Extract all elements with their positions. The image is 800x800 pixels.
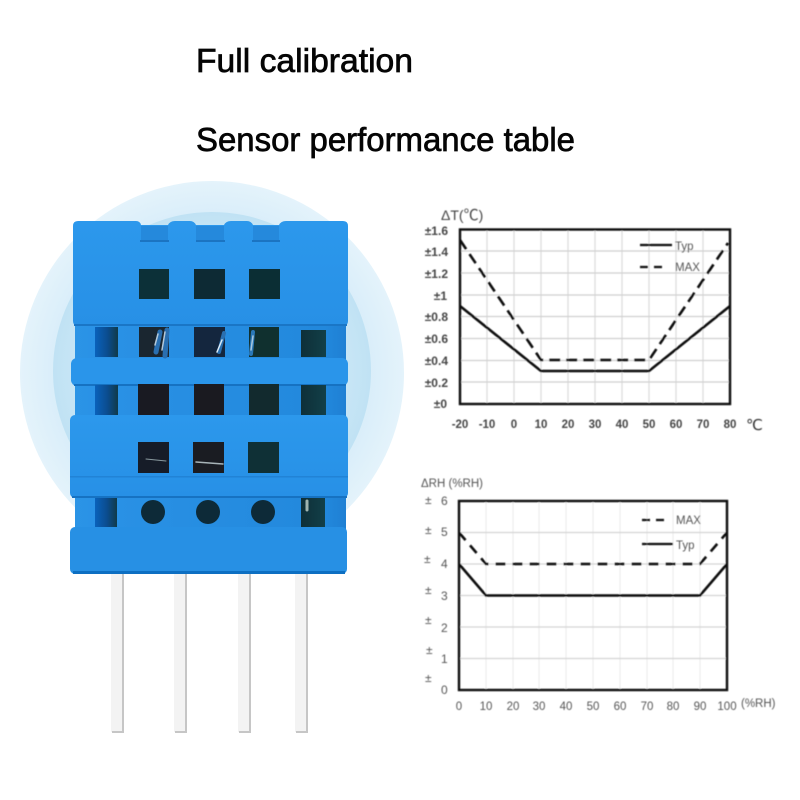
temperature x-axis labels: -10 — [479, 419, 495, 431]
humidity y-axis labels: ± — [425, 523, 432, 537]
temperature x-axis labels: 40 — [616, 419, 628, 431]
humidity y-axis labels: 3 — [441, 589, 448, 603]
lower section — [70, 415, 348, 498]
y-axis title: ΔT(℃) — [441, 204, 483, 225]
temperature x-axis labels: 80 — [724, 419, 736, 431]
humidity unit: (%RH) — [741, 698, 776, 710]
temperature x-axis labels: 20 — [562, 419, 574, 431]
humidity y-axis labels — [424, 493, 448, 697]
humidity x-axis labels: 80 — [667, 701, 679, 713]
humidity x-axis labels — [456, 701, 737, 713]
chart: humidity error — [421, 478, 776, 713]
title: heading text — [196, 42, 575, 158]
sensor grille windows — [95, 269, 326, 527]
temperature unit: ℃ — [746, 417, 763, 434]
top section with notches — [73, 221, 348, 326]
temperature y-axis labels: ±1.6 — [425, 224, 448, 238]
humidity x-axis labels: 90 — [694, 701, 706, 713]
temperature x-axis labels: 70 — [697, 419, 709, 431]
temperature gridlines — [460, 229, 730, 404]
temperature y-axis labels — [425, 224, 448, 411]
humidity legend: Typ — [676, 540, 695, 552]
background glow circles — [20, 181, 404, 565]
chart: temperature error — [425, 204, 763, 434]
humidity y-axis labels: 1 — [441, 652, 448, 666]
temperature x-axis labels — [452, 419, 736, 431]
humidity plot frame — [459, 501, 727, 690]
humidity y-axis labels: ± — [424, 552, 431, 566]
temperature legend: MAX — [675, 262, 700, 274]
temperature y-axis labels: ±0.4 — [425, 354, 448, 368]
humidity y-axis labels: ± — [425, 493, 432, 507]
humidity x-axis labels: 100 — [717, 701, 737, 713]
bottom bar — [70, 527, 347, 574]
temperature plot frame — [460, 230, 730, 404]
humidity x-axis labels: 40 — [560, 701, 572, 713]
humidity x-axis labels: 30 — [533, 701, 545, 713]
Typ line — [460, 306, 730, 371]
middle bar — [71, 358, 348, 386]
temperature x-axis labels: 0 — [511, 419, 517, 431]
icon: blue sensor body — [70, 221, 348, 574]
humidity y-axis labels: 5 — [441, 525, 448, 539]
temperature x-axis labels: 50 — [643, 419, 655, 431]
humidity x-axis labels: 60 — [614, 701, 626, 713]
humidity y-axis labels: ± — [425, 583, 432, 597]
temperature x-axis labels: -20 — [452, 419, 468, 431]
humidity y-axis labels: ± — [426, 643, 433, 657]
temperature y-axis labels: ±1.2 — [425, 267, 448, 281]
humidity y-axis labels: 0 — [441, 683, 448, 697]
humidity y-axis labels: ± — [425, 671, 432, 685]
icon: sensor pins — [111, 574, 308, 733]
humidity legend — [642, 515, 701, 552]
humidity x-axis labels: 0 — [456, 701, 462, 713]
title: heading text: Sensor performance table — [196, 121, 575, 158]
humidity x-axis labels: 70 — [641, 701, 653, 713]
temperature y-axis labels: ±0.8 — [425, 310, 448, 324]
MAX line — [460, 240, 728, 360]
humidity gridlines — [459, 501, 727, 690]
temperature legend — [640, 241, 700, 274]
window reflections — [146, 330, 307, 510]
temperature y-axis labels: ±0 — [434, 397, 447, 411]
temperature y-axis labels: ±1.4 — [425, 245, 448, 259]
humidity legend: MAX — [676, 515, 701, 527]
temperature y-axis labels: ±0.6 — [425, 332, 448, 346]
humidity y-axis labels: 4 — [441, 557, 448, 571]
temperature x-axis labels: 30 — [589, 419, 601, 431]
Typ line — [459, 564, 727, 596]
title: heading text: Full calibration — [196, 42, 413, 79]
humidity y-axis labels: 6 — [441, 494, 448, 508]
temperature x-axis labels: 60 — [670, 419, 682, 431]
MAX line — [459, 532, 727, 564]
humidity x-axis labels: 10 — [480, 701, 492, 713]
temperature y-axis labels: ±0.2 — [425, 376, 448, 390]
temperature legend: Typ — [675, 241, 694, 253]
y-axis title: ΔRH (%RH) — [421, 478, 483, 490]
humidity x-axis labels: 50 — [587, 701, 599, 713]
humidity y-axis labels: ± — [425, 613, 432, 627]
temperature y-axis labels: ±1 — [434, 289, 447, 303]
humidity x-axis labels: 20 — [507, 701, 519, 713]
temperature x-axis labels: 10 — [535, 419, 547, 431]
humidity y-axis labels: 2 — [441, 621, 448, 635]
